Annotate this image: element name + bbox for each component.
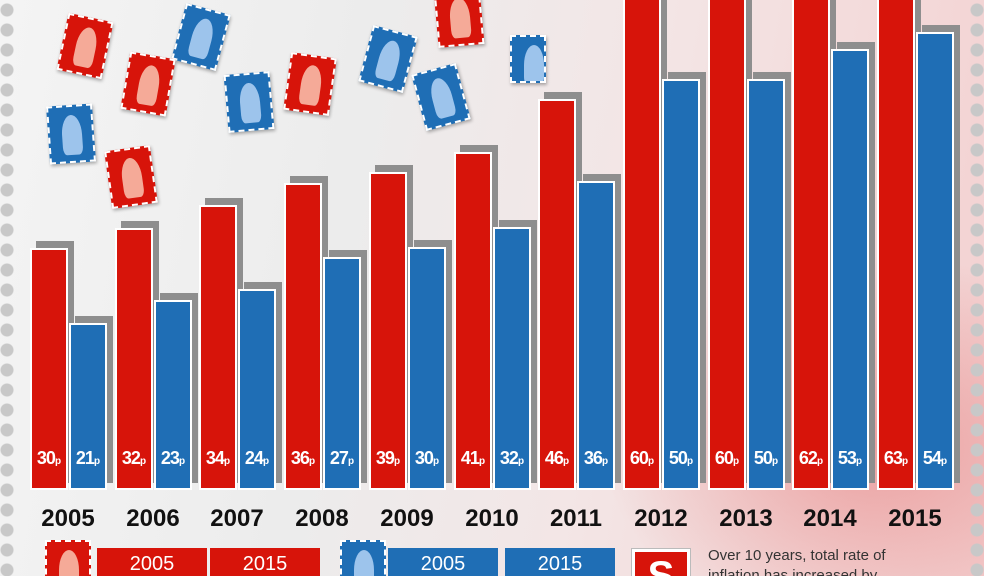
logo icon	[632, 549, 690, 576]
value labels: 23p	[161, 448, 185, 468]
value labels: 30p	[37, 448, 61, 468]
value labels: 41p	[461, 448, 485, 468]
legend: first class: 2015	[243, 553, 287, 575]
year axis labels: 2013	[719, 505, 773, 532]
value labels: 54p	[923, 448, 947, 468]
value labels: 32p	[122, 448, 146, 468]
value labels: 32p	[500, 448, 524, 468]
value labels: 60p	[715, 448, 739, 468]
legend: second class: 2015	[538, 553, 582, 575]
value labels: 27p	[330, 448, 354, 468]
year axis labels: 2014	[803, 505, 857, 532]
year axis labels: 2012	[634, 505, 688, 532]
legend: first class	[45, 540, 320, 576]
year axis labels: 2015	[888, 505, 942, 532]
decorative stamps	[46, 0, 549, 212]
value labels: 50p	[754, 448, 778, 468]
perforated edges	[0, 0, 14, 576]
value labels: 34p	[206, 448, 230, 468]
legend: second class	[340, 540, 615, 576]
year axis labels	[41, 505, 942, 532]
value labels: 24p	[245, 448, 269, 468]
value labels: 53p	[838, 448, 862, 468]
background blur red region	[600, 250, 984, 576]
year axis labels: 2008	[295, 505, 349, 532]
value labels: 46p	[545, 448, 569, 468]
year axis labels: 2006	[126, 505, 180, 532]
year axis labels: 2011	[550, 505, 602, 532]
value labels: 30p	[415, 448, 439, 468]
year axis labels: 2010	[465, 505, 519, 532]
value labels: 39p	[376, 448, 400, 468]
year axis labels: 2009	[380, 505, 434, 532]
value labels: 62p	[799, 448, 823, 468]
legend: second class: 2005	[421, 553, 465, 575]
value labels: 60p	[630, 448, 654, 468]
year axis labels: 2007	[210, 505, 264, 532]
value labels: 36p	[584, 448, 608, 468]
year axis labels: 2005	[41, 505, 95, 532]
value labels: 21p	[76, 448, 100, 468]
value labels: 63p	[884, 448, 908, 468]
value labels: 50p	[669, 448, 693, 468]
value labels: 36p	[291, 448, 315, 468]
legend: first class: 2005	[130, 553, 174, 575]
